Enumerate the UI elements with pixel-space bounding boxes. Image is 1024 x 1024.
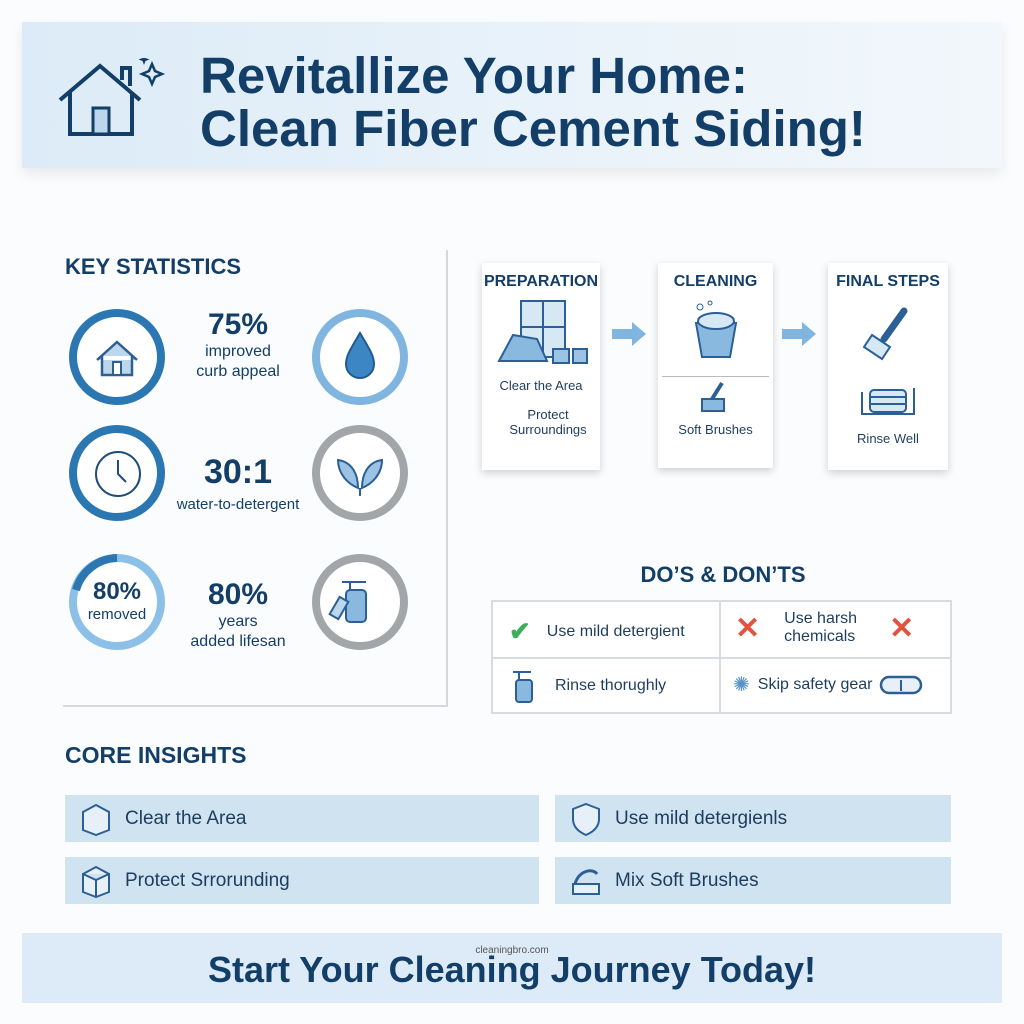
- card: preparation: [482, 263, 600, 470]
- stat: 80% years: added lifesan: [190, 633, 286, 650]
- stat: 30:1: 30:1: [204, 453, 272, 491]
- icon: hose: [861, 388, 915, 415]
- stat: 75%: [196, 308, 280, 380]
- insight: mild detergents: [555, 795, 951, 842]
- insight: protect surrounding: Protect Srrorunding: [125, 870, 290, 890]
- stat: 80% removed: 80%: [93, 578, 141, 605]
- stat: 80% years: years: [218, 613, 258, 630]
- stat: 75%: 75%: [208, 308, 268, 341]
- insight: protect surrounding: [65, 857, 539, 904]
- stat: 80% removed: removed: [88, 606, 146, 623]
- stat: 30:1: [176, 453, 300, 513]
- footer band: [22, 933, 1002, 1003]
- icon: brush: [862, 308, 908, 360]
- watermark: cleaningbro.com: [475, 945, 549, 956]
- insight: mild detergents: Use mild detergienls: [615, 808, 787, 828]
- dont: harsh chemicals: [735, 610, 914, 645]
- dont: safety gear: Skip safety gear: [758, 676, 872, 692]
- dont: harsh chemicals: Use harsh: [784, 610, 857, 627]
- dont: harsh chemicals: ✕: [735, 612, 760, 644]
- card: cleaning: CLEANING: [674, 273, 757, 290]
- card: final steps: FINAL STEPS: [836, 273, 940, 290]
- dont: harsh chemicals: ✕: [889, 612, 914, 644]
- panel: key statistics: [63, 250, 448, 707]
- card: preparation: PREPARATION: [484, 273, 598, 290]
- do: rinse: [513, 671, 666, 703]
- stat: 80% years: 80%: [208, 578, 268, 611]
- stat: 75%: curb appeal: [196, 363, 280, 380]
- dont: harsh chemicals: chemicals: [784, 628, 855, 645]
- do: mild detergent: [509, 616, 685, 646]
- card: preparation: Protect: [527, 407, 569, 422]
- card: final steps: [828, 263, 948, 470]
- table: do's and don'ts: [491, 600, 952, 714]
- title: Revitallize Your Home:: [200, 47, 748, 104]
- stat: 30:1: water-to-detergent: [177, 496, 299, 513]
- do: mild detergent: Use mild detergient: [547, 622, 685, 640]
- title: Clean Fiber Cement Siding!: [200, 100, 866, 157]
- title: [200, 47, 866, 157]
- icon: house: [58, 58, 165, 136]
- do: rinse: Rinse thorughly: [555, 677, 666, 694]
- icon: window and furniture: [497, 300, 588, 364]
- heading: do's and don'ts: DO’S & DON’TS: [640, 562, 806, 587]
- arrow: [782, 322, 816, 346]
- arrow: [612, 322, 646, 346]
- stat circles: [69, 309, 408, 650]
- stat: 80% years: [190, 578, 286, 650]
- stat: 80% removed: [88, 578, 146, 623]
- insight: clear the area: Clear the Area: [125, 808, 246, 828]
- stat: 75%: improved: [205, 343, 271, 360]
- insight: soft brushes: [555, 857, 951, 904]
- do: mild detergent: ✔: [509, 616, 531, 646]
- card: final steps: Rinse Well: [857, 431, 919, 446]
- icon: bucket: [694, 300, 738, 358]
- insight: soft brushes: Mix Soft Brushes: [615, 870, 759, 890]
- card: preparation: Clear the Area: [499, 378, 583, 393]
- card: cleaning: [658, 263, 773, 468]
- card: preparation: Surroundings: [509, 422, 587, 437]
- header band: [22, 22, 1002, 168]
- card: cleaning: Soft Brushes: [678, 422, 753, 437]
- insight: clear the area: [65, 795, 539, 842]
- call to action: Start Your Cleaning Journey Today!: [208, 949, 816, 990]
- dont: safety gear: [733, 674, 922, 696]
- icon: brush: [701, 382, 725, 412]
- heading: key statistics: KEY STATISTICS: [65, 254, 241, 279]
- heading: core insights: CORE INSIGHTS: [65, 742, 246, 768]
- dont: safety gear: ✺: [733, 674, 750, 696]
